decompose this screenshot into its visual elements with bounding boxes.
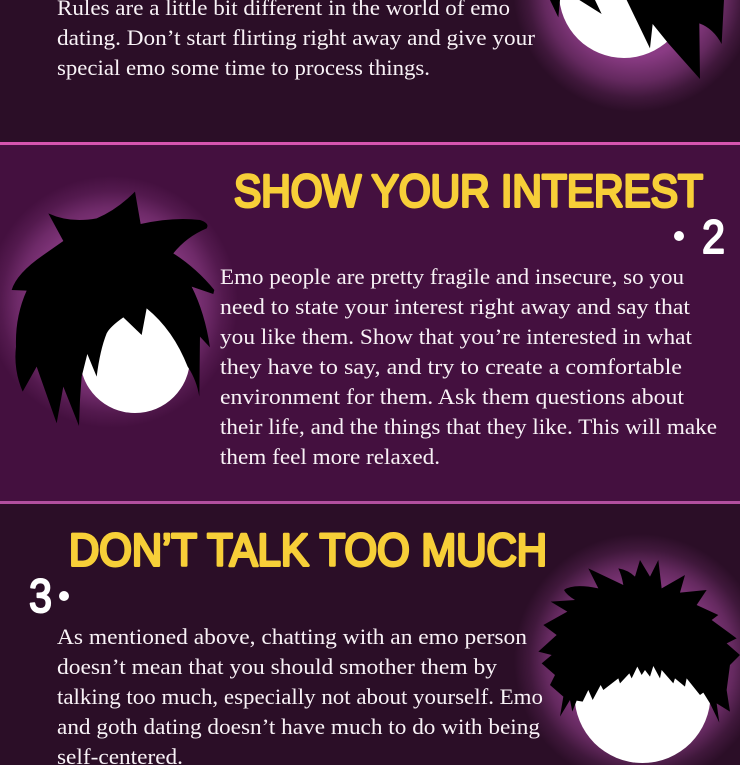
icon: emo head with short spiky hair bbox=[514, 534, 740, 765]
text block: tip 2 body: them feel more relaxed. bbox=[220, 444, 440, 469]
heading: don't talk too much: DON’T TALK TOO MUCH bbox=[69, 524, 547, 576]
text block: tip 3 body: doesn’t mean that you should smother them by bbox=[57, 654, 498, 679]
text block: tip 3 body: talking too much, especially not about yourself. Emo bbox=[57, 684, 543, 709]
number badge: 3 bbox=[29, 569, 69, 622]
text block: tip 2 body: Emo people are pretty fragile and insecure, so you bbox=[220, 264, 684, 289]
icon: emo head with spiky hair, top right bbox=[513, 0, 740, 112]
panel: tip 3 don't talk too much bbox=[30, 532, 740, 765]
text block: tip 2 body: you like them. Show that you’re interested in what bbox=[220, 324, 693, 349]
panel: tip 1 intro bbox=[58, 0, 740, 106]
heading: show your interest: SHOW YOUR INTEREST bbox=[234, 166, 703, 216]
divider line: pink bbox=[0, 142, 740, 145]
text block: tip 1 body bbox=[57, 0, 536, 80]
text block: tip 2 body bbox=[220, 264, 717, 469]
number badge: 3: 3 bbox=[29, 569, 52, 622]
text block: tip 1 body: dating. Don’t start flirting right away and give your bbox=[57, 25, 536, 50]
text block: tip 3 body: As mentioned above, chatting with an emo person bbox=[57, 624, 527, 649]
number badge: 2: 2 bbox=[702, 210, 725, 263]
text block: tip 2 body: they have to say, and try to create a comfortable bbox=[220, 354, 682, 379]
text block: tip 1 body: special emo some time to process things. bbox=[57, 55, 430, 80]
text block: tip 3 body bbox=[57, 624, 543, 765]
text block: tip 2 body: environment for them. Ask them questions about bbox=[220, 384, 685, 409]
text block: tip 3 body: and goth dating doesn’t have much to do with being bbox=[57, 714, 540, 739]
icon: emo head with long spiky hair bbox=[0, 176, 238, 428]
number badge: 2 bbox=[674, 210, 725, 263]
text block: tip 2 body: their life, and the things that they like. This will make bbox=[220, 414, 717, 439]
divider line: magenta bbox=[0, 501, 740, 504]
panel: tip 2 show your interest bbox=[0, 145, 740, 501]
text block: tip 2 body: need to state your interest right away and say that bbox=[220, 294, 691, 319]
